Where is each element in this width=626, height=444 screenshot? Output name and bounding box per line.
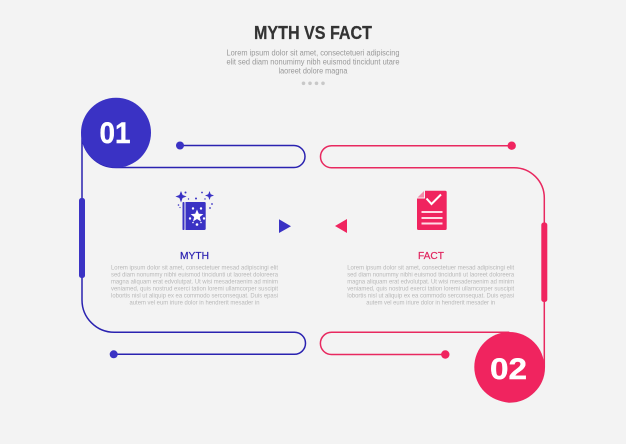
text block: fact: autem vel eum iriure dolor in hendrerit mesader in bbox=[366, 300, 496, 306]
heading: fact: FACT bbox=[418, 250, 445, 262]
text block: myth: sed diam nonummy nibhi euismod tincidunti ut laoreet doloreera bbox=[111, 272, 278, 278]
text block: myth: veniamed, quis nostrud exerci tation loremi ullamcorper suscipit bbox=[111, 286, 278, 292]
subtitle text: elit sed diam nonumimy nibh euismod tincidunt utare bbox=[226, 58, 400, 66]
text block: fact: sed diam nonummy nibhi euismod tincidunti ut laoreet doloreera bbox=[347, 272, 515, 278]
icon: fact checklist document bbox=[417, 191, 447, 230]
number badge 02: 02 bbox=[490, 353, 527, 386]
text block: myth bbox=[111, 264, 278, 306]
subtitle text: laoreet dolore magna bbox=[278, 66, 348, 76]
number badge 01 bbox=[81, 98, 151, 168]
pagination dots bbox=[302, 82, 325, 85]
panel: myth outline bbox=[79, 98, 306, 358]
text block: fact: lobortis nisl ut aliquip ex ea commodo serconsequat. Duis epasi bbox=[347, 292, 514, 300]
end dot: fact top bbox=[508, 142, 516, 150]
panel: fact outline bbox=[320, 142, 547, 402]
end dot: myth top bbox=[176, 142, 184, 150]
icon: magic book bbox=[175, 191, 214, 230]
connector line: myth bbox=[82, 134, 306, 354]
number badge 02 bbox=[474, 332, 544, 402]
number badge 01: 01 bbox=[100, 117, 130, 150]
connector line: fact bbox=[320, 146, 544, 402]
text block: fact: veniamed, quis nostrud exerci tation loremi ullamcorper suscipit bbox=[347, 286, 514, 292]
arrow: left bbox=[335, 219, 347, 233]
arrow: right bbox=[279, 219, 291, 233]
accent bar: fact bbox=[541, 222, 547, 302]
title: MYTH VS FACT bbox=[254, 23, 372, 43]
text block: fact: Lorem ipsum dolor sit amet, consectetuer mesad adipiscingi elit bbox=[347, 264, 514, 272]
heading: myth: MYTH bbox=[180, 250, 209, 262]
text block: fact bbox=[347, 264, 515, 306]
subtitle text: Lorem ipsum dolor sit amet, consectetueri adipiscing bbox=[226, 48, 400, 58]
text block: myth: lobortis nisl ut aliquip ex ea commodo serconsequat. Duis epasi bbox=[111, 292, 278, 300]
text block: myth: Lorem ipsum dolor sit amet, consectetuer mesad adipiscingi elit bbox=[111, 264, 278, 272]
text block: fact: magna aliquam erat edvolutpat. Ut wisi mesaderaenim ad minim bbox=[347, 278, 514, 286]
accent bar: myth bbox=[79, 198, 85, 278]
end dot: fact bottom bbox=[441, 350, 449, 359]
text block: myth: autem vel eum iriure dolor in hendrerit mesader in bbox=[130, 300, 260, 306]
text block: myth: magna aliquam erat edvolutpat. Ut wisi mesaderaenim ad minim bbox=[111, 278, 278, 286]
subtitle text bbox=[226, 48, 400, 76]
end dot: myth bottom bbox=[110, 350, 118, 358]
